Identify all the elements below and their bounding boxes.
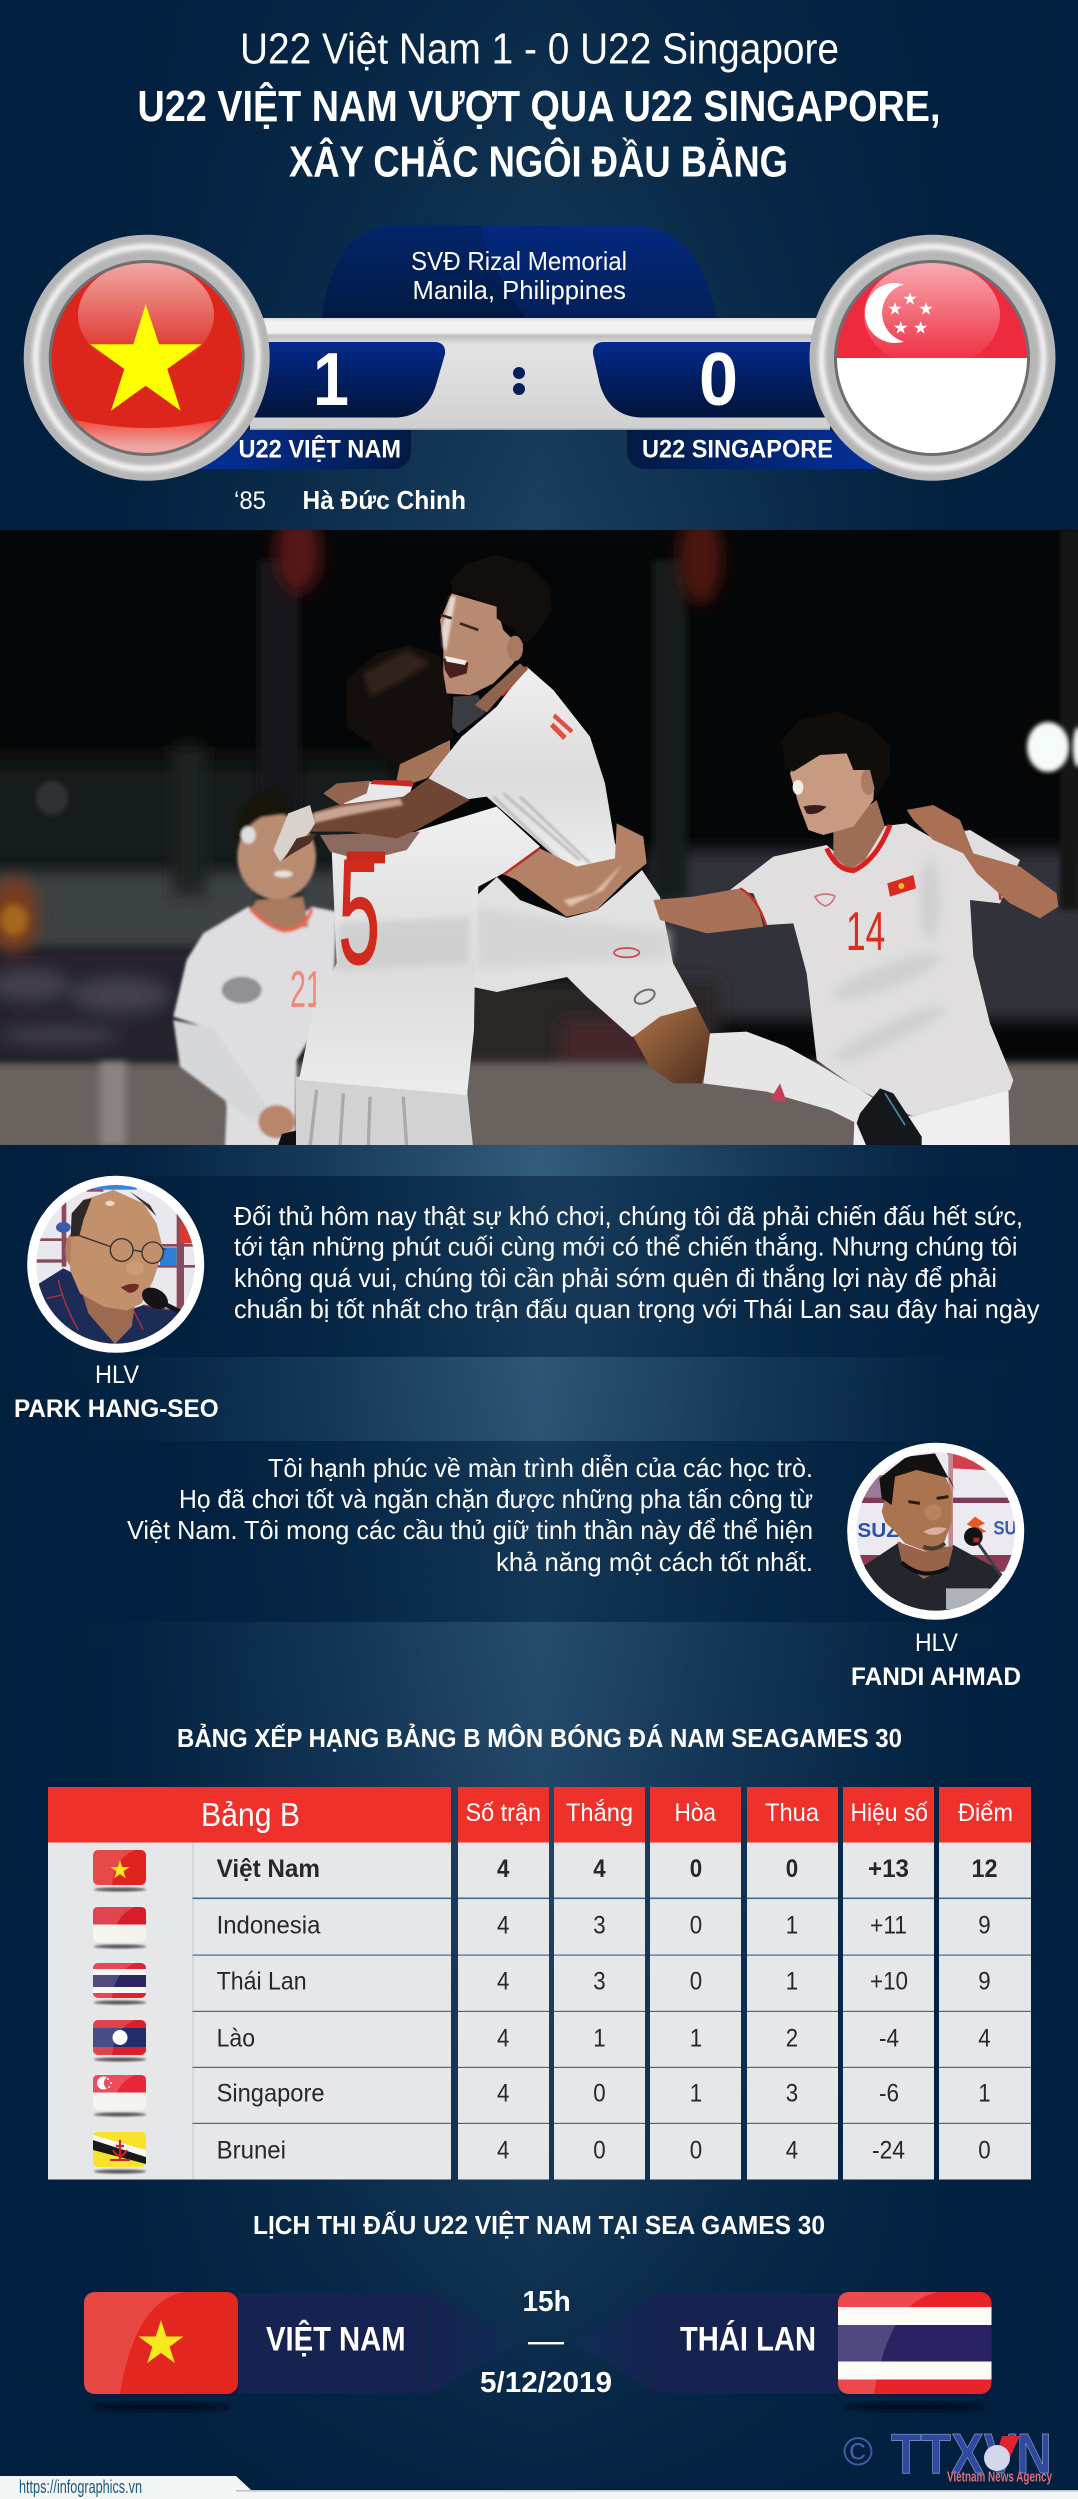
- wordmark: TTXVN: [891, 2422, 1052, 2486]
- lower legs and right player: [633, 712, 1058, 1147]
- score: home: [254, 337, 445, 421]
- quote text: khả năng một cách tốt nhất.: [496, 1547, 813, 1577]
- row: Lào: 4: [978, 2025, 991, 2053]
- colon: [513, 367, 525, 395]
- headline line 2: XÂY CHẮC NGÔI ĐẦU BẢNG: [289, 136, 788, 186]
- row: Việt Nam: Việt Nam: [217, 1855, 320, 1883]
- quote background: [65, 1441, 1025, 1622]
- row: Indonesia: 9: [978, 1911, 991, 1939]
- row: Singapore: 3: [786, 2080, 798, 2108]
- goal scorer: Hà Đức Chinh: [302, 485, 466, 515]
- row: Brunei: 4: [786, 2136, 798, 2164]
- row: Lào: [93, 2020, 991, 2062]
- arm of player 5 around jumper: [503, 823, 647, 917]
- row: Singapore: 4: [497, 2080, 509, 2108]
- quote text: Họ đã chơi tốt và ngăn chặn được những pha tấn công từ: [179, 1484, 813, 1514]
- player 5 neck: [397, 740, 450, 784]
- portrait: Fandi Ahmad: SUZ: [857, 1520, 899, 1542]
- dash: [528, 2342, 564, 2344]
- team band: Việt Nam: [238, 2293, 518, 2393]
- row: Indonesia: Indonesia: [217, 1911, 320, 1939]
- quote panel: Fandi Ahmad: [65, 1441, 1025, 1691]
- black boot fragment: [278, 1130, 296, 1145]
- row: Brunei: -24: [872, 2136, 905, 2164]
- red V accent: [996, 2436, 1020, 2470]
- row: Indonesia: 0: [690, 1911, 702, 1939]
- jersey number 14: 14: [846, 900, 885, 962]
- table header: Hòa: [674, 1799, 716, 1827]
- table header: Hiệu số: [850, 1799, 928, 1827]
- player 14 head: [790, 753, 875, 835]
- shorts of player 5: [296, 1077, 473, 1147]
- venue text: SVĐ Rizal Memorial: [411, 246, 627, 276]
- score: away: 0: [699, 337, 738, 421]
- row: Brunei: 4: [497, 2136, 509, 2164]
- goal scorer: ‘85: [234, 487, 266, 515]
- next match panel: [84, 2286, 992, 2411]
- quote text: tới tận những phút cuối cùng mới có thể chiến thắng. Nhưng chúng tôi: [234, 1232, 1018, 1262]
- flag icon: Vietnam: [93, 1850, 146, 1892]
- quote text: không quá vui, chúng tôi cần phải sớm quên đi thắng lợi này để phải: [234, 1263, 997, 1293]
- team label: U22 Singapore: [627, 430, 877, 469]
- venue arch: Manila, Philippines: [412, 275, 626, 305]
- source url: https://infographics.vn: [19, 2477, 142, 2497]
- row: Brunei: 0: [978, 2136, 991, 2164]
- row: Việt Nam: 0: [786, 1855, 798, 1883]
- copyright mark: ©: [843, 2430, 873, 2474]
- quote text: Việt Nam. Tôi mong các cầu thủ giữ tinh thần này để thể hiện: [127, 1515, 813, 1545]
- row: Lào: 1: [690, 2025, 702, 2053]
- team band: Thái Lan: THÁI LAN: [680, 2321, 816, 2359]
- scoreboard: [24, 225, 1056, 515]
- player 14 arms: [653, 888, 763, 933]
- row: Thái Lan: 1: [786, 1967, 798, 1995]
- standings table: [48, 1787, 1031, 2180]
- portrait: Fandi Ahmad: [847, 1443, 1024, 1620]
- row: Brunei: 0: [690, 2136, 702, 2164]
- sock: [703, 1032, 877, 1123]
- jumper face and hair: [475, 663, 527, 713]
- row: Brunei: [93, 2132, 991, 2174]
- caption: coach name: PARK HANG-SEO: [14, 1395, 219, 1423]
- back jersey: [299, 782, 540, 1095]
- quote text: Tôi hạnh phúc về màn trình diễn của các học trò.: [268, 1453, 813, 1483]
- globe: [984, 2445, 1010, 2471]
- footer bar: [0, 2476, 1078, 2499]
- caption: HLV: HLV: [915, 1629, 958, 1657]
- medal flag: Singapore: [810, 235, 1056, 481]
- score: away: [593, 337, 825, 421]
- heading: schedule: LỊCH THI ĐẤU U22 VIỆT NAM TẠI SEA GAMES 30: [253, 2210, 825, 2240]
- match date: 5/12/2019: [480, 2367, 612, 2399]
- row: Lào: 1: [593, 2025, 606, 2053]
- row: Thái Lan: 9: [978, 1967, 991, 1995]
- row: Việt Nam: [93, 1850, 998, 1892]
- row: Singapore: 1: [978, 2080, 991, 2108]
- row: Singapore: [93, 2075, 991, 2116]
- title block: [138, 24, 940, 186]
- row: Singapore: Singapore: [217, 2080, 324, 2108]
- team label: U22 Việt Nam: U22 VIỆT NAM: [238, 433, 401, 463]
- row: Brunei: Brunei: [217, 2136, 286, 2164]
- row: Singapore: 0: [593, 2080, 606, 2108]
- table header: [48, 1787, 1031, 1842]
- row: Lào: -4: [879, 2025, 899, 2053]
- table header: Bảng B: [201, 1796, 300, 1833]
- jersey number 21: 21: [290, 961, 322, 1019]
- quote text: [127, 1453, 813, 1577]
- caption: coach name: FANDI AHMAD: [851, 1663, 1021, 1691]
- table header: Thua: [765, 1799, 819, 1827]
- flag icon: Thailand: [93, 1963, 146, 2004]
- row: Thái Lan: +10: [870, 1967, 908, 1995]
- row: Việt Nam: 4: [497, 1855, 509, 1883]
- table header: Số trận: [466, 1799, 541, 1827]
- quote text: [234, 1201, 1040, 1324]
- quote text: Đối thủ hôm nay thật sự khó chơi, chúng tôi đã phải chiến đấu hết sức,: [234, 1201, 1023, 1231]
- row: Indonesia: +11: [870, 1911, 907, 1939]
- quote text: chuẩn bị tốt nhất cho trận đấu quan trọng với Thái Lan sau đây hai ngày: [234, 1294, 1040, 1324]
- table body cells: [48, 1842, 1031, 2180]
- row: Thái Lan: [93, 1963, 991, 2004]
- portrait: Park Hang-seo: [27, 1176, 204, 1353]
- flag: Vietnam: [84, 2292, 238, 2411]
- row: Thái Lan: 3: [593, 1967, 606, 1995]
- row: Việt Nam: 0: [690, 1855, 702, 1883]
- background: [170, 0, 908, 2422]
- player 5 and top jumping player: [273, 555, 697, 1147]
- flag: Thailand: [838, 2292, 992, 2411]
- player 5 and top jumping player: 5: [338, 827, 380, 995]
- row: Indonesia: 4: [497, 1911, 509, 1939]
- team band: Thái Lan: [572, 2293, 840, 2393]
- kickoff time: 15h: [522, 2286, 571, 2318]
- flag icon: Laos: [93, 2020, 146, 2062]
- medal flag: Vietnam: [24, 235, 270, 481]
- thigh: [633, 1007, 710, 1083]
- row: Việt Nam: 4: [593, 1855, 606, 1883]
- table header: Điểm: [958, 1799, 1013, 1827]
- photo: players celebrating: [0, 510, 1078, 1152]
- row: Indonesia: 1: [786, 1911, 798, 1939]
- row: Lào: 2: [786, 2025, 798, 2053]
- flag icon: Brunei: [93, 2132, 146, 2174]
- row: Indonesia: 3: [593, 1911, 606, 1939]
- row: Indonesia: [93, 1907, 991, 1948]
- flag icon: Indonesia: [93, 1907, 146, 1948]
- row: Thái Lan: 0: [690, 1967, 702, 1995]
- shorts of jumping player: [473, 870, 697, 1037]
- row: Singapore: 1: [690, 2080, 702, 2108]
- player 14 neck: [833, 800, 885, 870]
- caption: HLV: HLV: [95, 1361, 139, 1389]
- table header: Thắng: [566, 1798, 633, 1827]
- player 14 jersey and shorts: [730, 823, 1020, 1147]
- jumper jersey: [428, 667, 623, 867]
- silver score bar: [250, 318, 830, 430]
- jumper neck shadow: [452, 695, 485, 733]
- score: home: 1: [313, 337, 349, 421]
- row: Việt Nam: 12: [972, 1855, 998, 1883]
- portrait: Fandi Ahmad: SU: [993, 1518, 1017, 1539]
- row: Thái Lan: 4: [497, 1967, 509, 1995]
- team label: U22 Singapore: U22 SINGAPORE: [642, 435, 833, 463]
- goal scorer: [234, 485, 466, 515]
- subtitle: score line: U22 Việt Nam 1 - 0 U22 Singapore: [240, 24, 839, 74]
- flag icon: Singapore: [93, 2075, 146, 2116]
- row: Singapore: -6: [879, 2080, 899, 2108]
- row: Việt Nam: +13: [868, 1855, 909, 1883]
- player 5 hair: [347, 645, 453, 767]
- heading: standings: BẢNG XẾP HẠNG BẢNG B MÔN BÓNG ĐÁ NAM SEAGAMES 30: [177, 1723, 902, 1753]
- team band: Việt Nam: VIỆT NAM: [266, 2321, 406, 2359]
- logo: TTXVN: [843, 2422, 1052, 2486]
- boot: [857, 1088, 922, 1147]
- row: Brunei: 0: [593, 2136, 606, 2164]
- team label: U22 Việt Nam: [199, 430, 411, 469]
- row: Lào: 4: [497, 2025, 509, 2053]
- quote panel: Park Hang-seo: [14, 1176, 1062, 1423]
- jumper arm over shoulder: [310, 778, 470, 838]
- player 21 (blurred, left): [173, 787, 337, 1147]
- row: Thái Lan: Thái Lan: [217, 1967, 307, 1995]
- stadium background: [0, 510, 1078, 1152]
- headline line 1: U22 VIỆT NAM VƯỢT QUA U22 SINGAPORE,: [138, 81, 940, 131]
- row: Lào: Lào: [217, 2025, 255, 2053]
- quote background: [117, 1176, 1062, 1357]
- venue arch: [322, 225, 716, 318]
